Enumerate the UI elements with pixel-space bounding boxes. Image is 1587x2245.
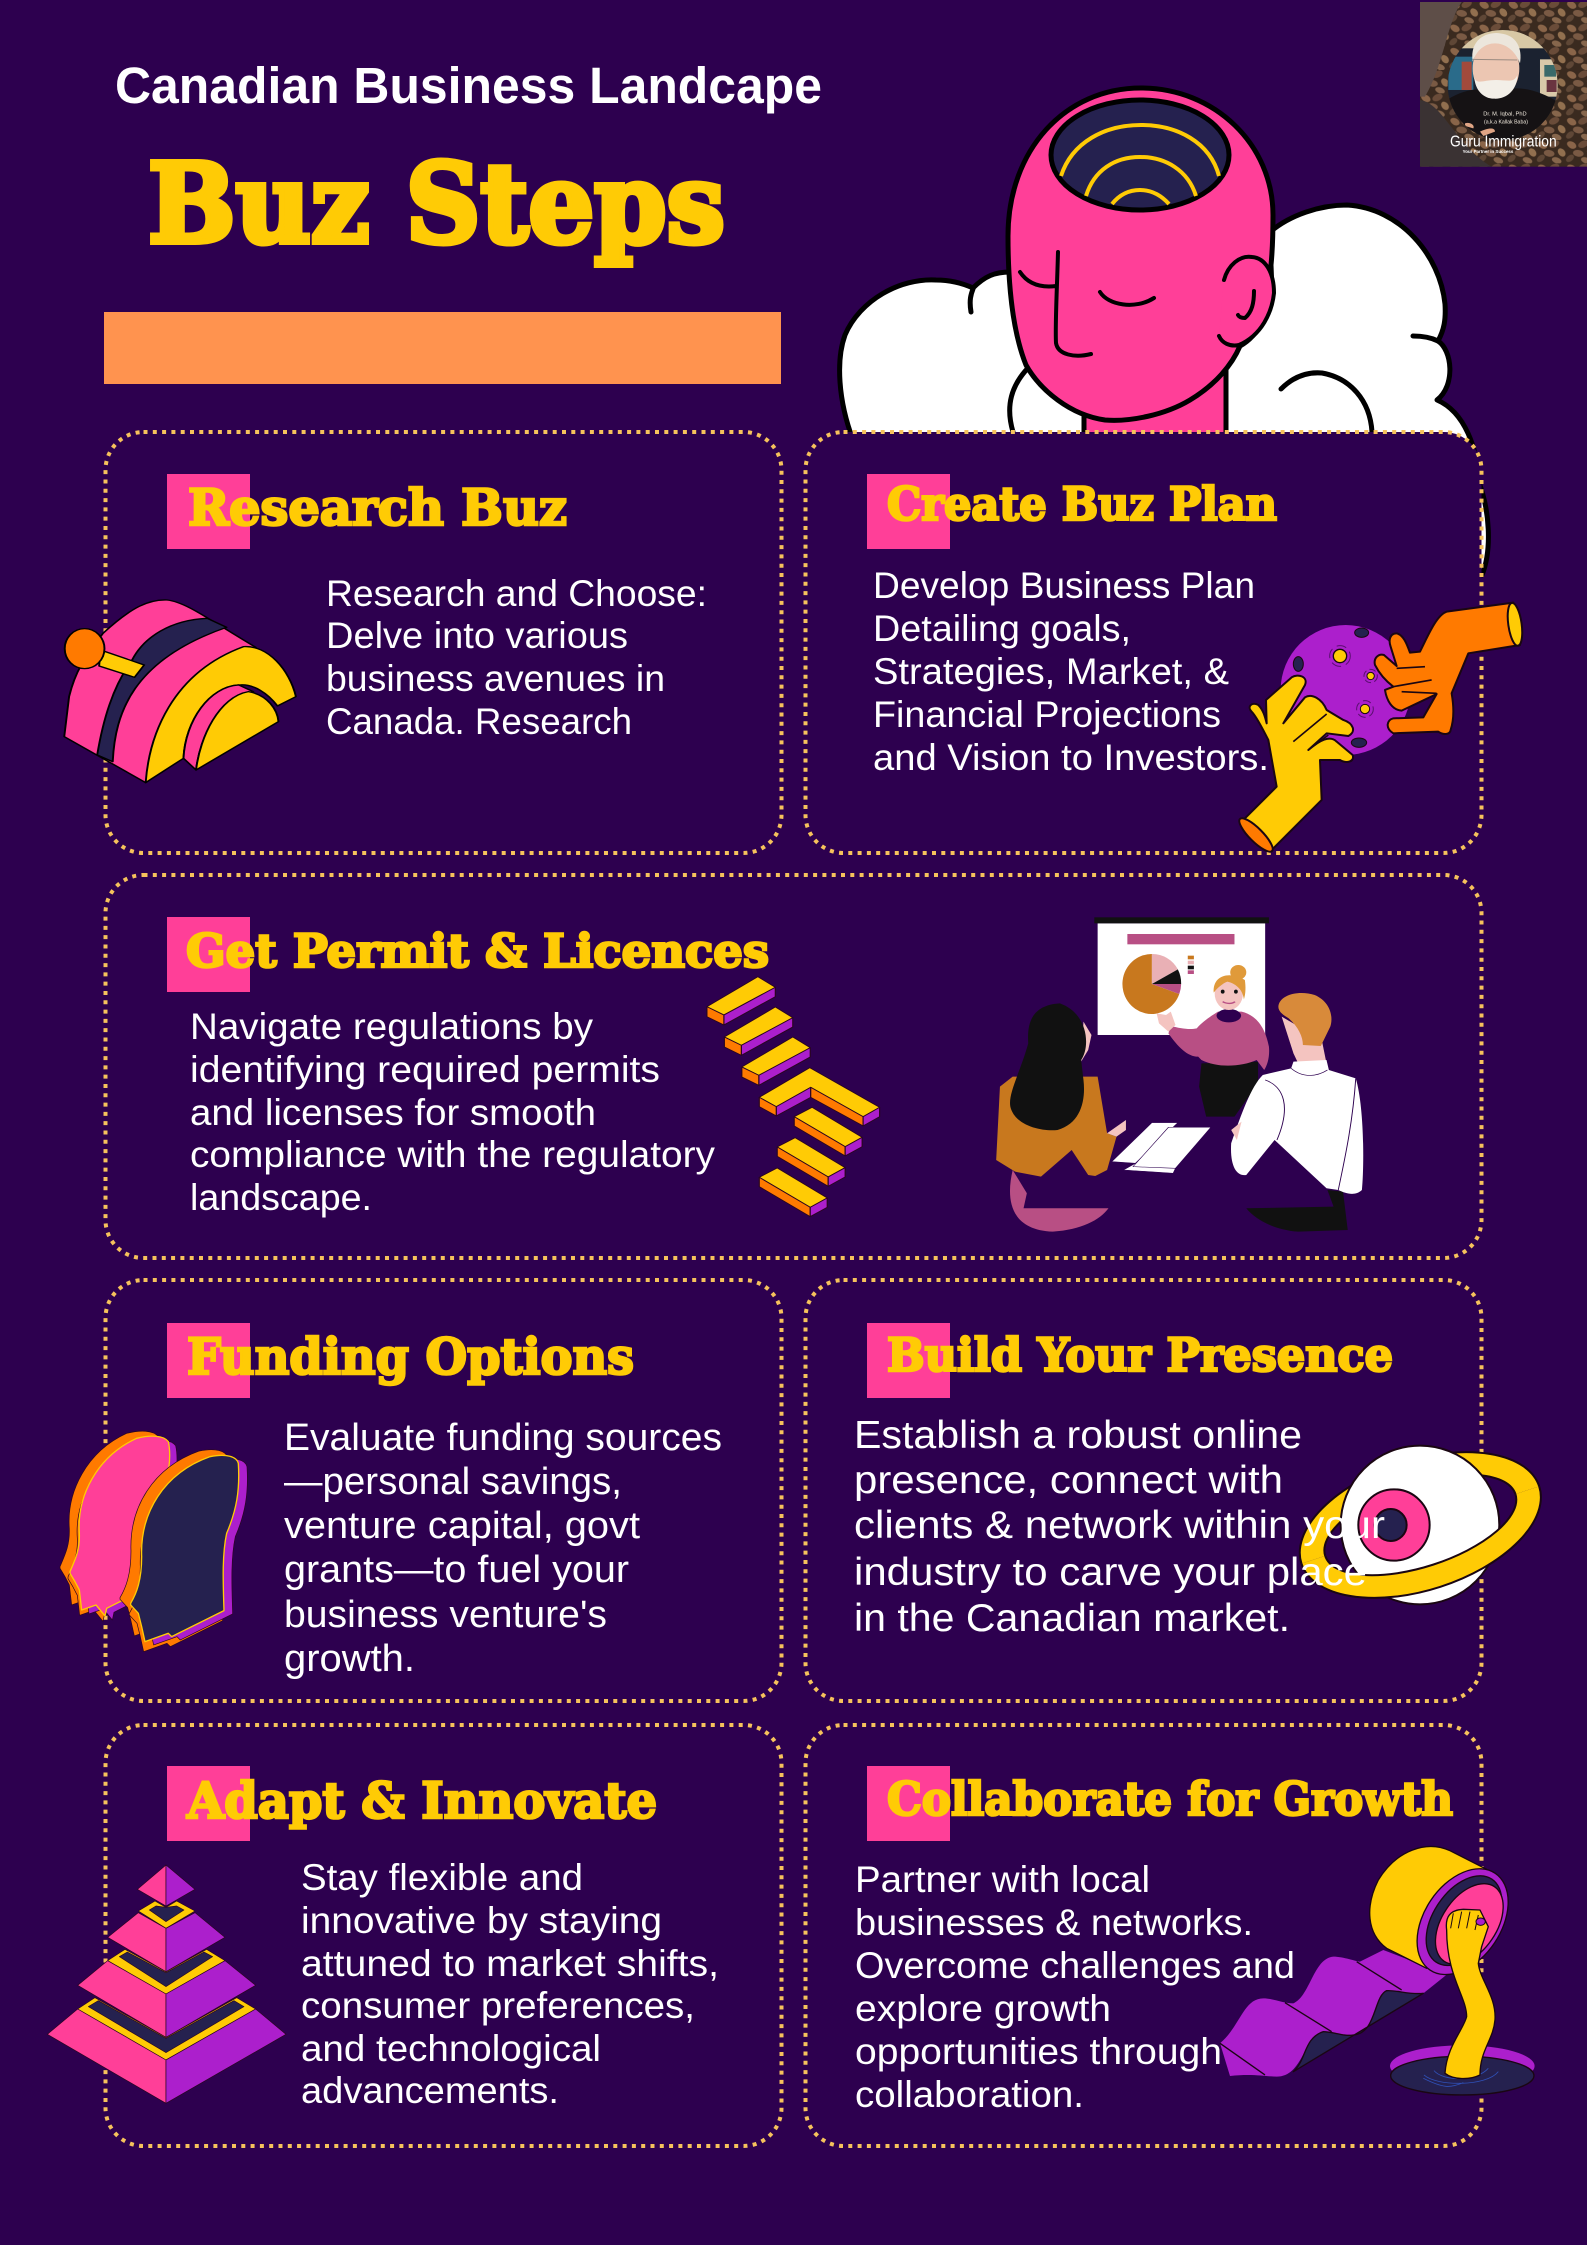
panel: research buz (64, 432, 782, 853)
body text: presence: Establish a robust online (854, 1414, 1302, 1457)
icon: eyeball planet with ring (1281, 1425, 1559, 1625)
body text: funding: grants—to fuel your (284, 1549, 629, 1591)
heading: Adapt & Innovate: Adapt & Innovate (186, 1771, 657, 1830)
body text: adapt: attuned to market shifts, (301, 1943, 719, 1984)
body text: permits: compliance with the regulatory (190, 1134, 716, 1175)
woman with black hair (996, 1003, 1126, 1232)
body text: create plan (873, 565, 1269, 778)
photo badge: Guru Immigration: (a.k.a Kallak Baba) (1484, 119, 1528, 125)
heading: Build Your Presence: Build Your Presence (887, 1328, 1393, 1382)
body text: permits (190, 1006, 716, 1218)
body text: research: Canada. Research (326, 701, 632, 742)
illustration: presentation meeting (996, 917, 1363, 1232)
body text: funding: growth. (284, 1638, 415, 1680)
body text: funding: —personal savings, (284, 1461, 622, 1503)
papers on table (1112, 1123, 1211, 1173)
icon: tape roll and hand (1220, 1847, 1535, 2095)
body text: presence: industry to carve your place (854, 1551, 1367, 1594)
photo badge: Guru Immigration: Your Partner in Success (1463, 149, 1514, 154)
body text: presence: in the Canadian market. (854, 1597, 1290, 1640)
heading: Collaborate for Growth: Collaborate for Growth (887, 1772, 1453, 1826)
icon: hands holding planet (1235, 602, 1525, 856)
panel: collaborate for growth (806, 1725, 1535, 2146)
body text: collaborate: Overcome challenges and (855, 1945, 1295, 1986)
body text: create plan: Strategies, Market, & (873, 651, 1229, 692)
icon: rainbow arch (64, 600, 296, 783)
panel: adapt and innovate (47, 1725, 781, 2146)
panel: funding options (60, 1280, 782, 1701)
title: Canadian Business Landcape: Canadian Business Landcape (115, 57, 822, 114)
body text: funding: venture capital, govt (284, 1505, 640, 1547)
panel: create buz plan (806, 432, 1525, 856)
heading: Collaborate for Growth (867, 1766, 1453, 1841)
heading: Funding Options: Funding Options (187, 1327, 634, 1386)
man with white shirt (1231, 993, 1363, 1232)
heading: Build Your Presence (867, 1323, 1393, 1398)
heading: Research Buz: Research Buz (188, 478, 567, 537)
body text: research: Delve into various (326, 615, 628, 656)
body text: adapt: innovative by staying (301, 1900, 662, 1941)
body text: funding (284, 1417, 722, 1680)
body text: adapt: and technological (301, 2028, 601, 2069)
body text: funding: business venture's (284, 1594, 607, 1636)
body text: adapt: advancements. (301, 2070, 559, 2111)
heading: Get Permit & Licences (167, 917, 769, 992)
photo badge: Guru Immigration: Dr. M. Iqbal, PhD (1483, 111, 1527, 117)
body text: adapt (301, 1857, 719, 2111)
body text: permits: identifying required permits (190, 1049, 660, 1090)
body text: adapt: Stay flexible and (301, 1857, 583, 1898)
body text: permits: and licenses for smooth (190, 1092, 596, 1133)
body text: research: business avenues in (326, 658, 665, 699)
illustration: pink head with clouds (840, 88, 1488, 575)
panel: get permit and licences (106, 875, 1482, 1258)
presentation board with pie chart (1094, 917, 1269, 1035)
body text: collaborate: Partner with local (855, 1859, 1150, 1900)
photo badge: Guru Immigration: Guru Immigration (1450, 134, 1557, 151)
body text: presence (854, 1414, 1385, 1640)
body text: research (326, 573, 707, 742)
body text: create plan: Financial Projections (873, 694, 1221, 735)
body text: research: Research and Choose: (326, 573, 707, 614)
body text: collaborate: businesses & networks. (855, 1902, 1253, 1943)
icon: layered pyramid (47, 1865, 286, 2103)
body text: collaborate: opportunities through (855, 2031, 1222, 2072)
panel: build your presence (806, 1280, 1559, 1701)
heading: Get Permit & Licences: Get Permit & Licences (186, 924, 769, 978)
body text: collaborate: explore growth (855, 1988, 1111, 2029)
heading: Create Buz Plan (867, 474, 1277, 549)
title: Buz Steps: Buz Steps (148, 139, 725, 268)
body text: collaborate: collaboration. (855, 2074, 1084, 2115)
body text: collaborate (855, 1859, 1295, 2115)
heading: Create Buz Plan: Create Buz Plan (887, 477, 1277, 531)
body text: funding: Evaluate funding sources (284, 1417, 722, 1459)
body text: create plan: and Vision to Investors. (873, 737, 1269, 778)
body text: presence: presence, connect with (854, 1459, 1283, 1502)
body text: create plan: Detailing goals, (873, 608, 1131, 649)
icon: two head silhouettes (60, 1431, 247, 1652)
body text: presence: clients & network within your (854, 1504, 1385, 1547)
orange banner bar (104, 312, 781, 384)
icon: isometric stairs (707, 977, 880, 1217)
body text: adapt: consumer preferences, (301, 1985, 695, 2026)
body text: permits: landscape. (190, 1177, 372, 1218)
body text: create plan: Develop Business Plan (873, 565, 1255, 606)
body text: permits: Navigate regulations by (190, 1006, 594, 1047)
photo badge: Guru Immigration (1420, 2, 1587, 167)
presenter (1157, 965, 1269, 1117)
